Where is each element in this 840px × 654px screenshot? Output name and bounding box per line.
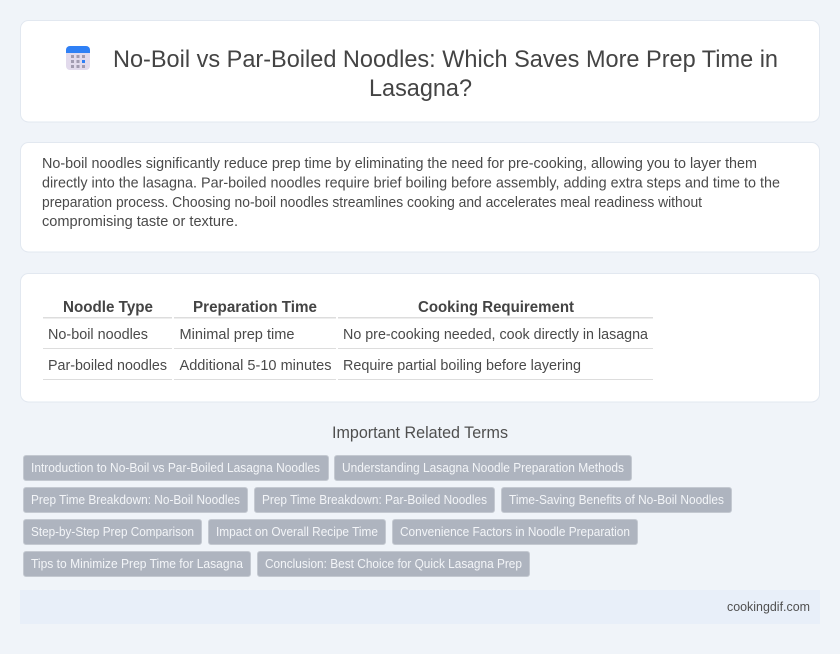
tag [24,520,202,544]
heading: related terms: Important Related Terms [332,424,508,442]
tag: Understanding Lasagna Noodle Preparation Methods [342,461,624,475]
tag: Convenience Factors in Noodle Preparation [400,525,630,539]
tag: Conclusion: Best Choice for Quick Lasagna Prep [265,557,522,571]
footer source: cookingdif.com [727,599,810,614]
tag [334,456,632,480]
tag [254,488,494,512]
table header [63,299,575,316]
tag: Step-by-Step Prep Comparison [31,525,194,539]
summary text: directly into the lasagna. Par-boiled noodles require brief boiling before assembly, adding extra steps and time to the [42,176,780,192]
tag: Time-Saving Benefits of No-Boil Noodles [509,493,724,507]
tag [24,456,328,480]
footer [20,590,820,624]
summary text: preparation process. Choosing no-boil noodles streamlines cooking and accelerates meal readiness without [42,195,702,211]
table rows: Require partial boiling before layering [343,358,581,374]
tag list [24,456,732,576]
tag [258,552,530,576]
table header: Noodle Type [63,299,153,316]
tag [24,488,248,512]
panel: summary [20,142,820,252]
panel: header [20,20,820,122]
tag: Introduction to No-Boil vs Par-Boiled Lasagna Noodles [31,461,320,475]
tag: Tips to Minimize Prep Time for Lasagna [31,557,243,571]
table rows: Minimal prep time [180,327,294,343]
table rows [48,327,648,374]
tag [24,552,250,576]
table rows: No pre-cooking needed, cook directly in lasagna [343,327,648,343]
tag [208,520,386,544]
table header: Cooking Requirement [418,299,575,316]
table header: Preparation Time [193,299,317,316]
table rows: No-boil noodles [48,327,148,343]
summary text: No-boil noodles significantly reduce prep time by eliminating the need for pre-cooking, allowing you to layer them [42,156,757,172]
tag [502,488,732,512]
table rows: Par-boiled noodles [48,358,167,374]
tag: Prep Time Breakdown: Par-Boiled Noodles [262,493,487,507]
summary text: compromising taste or texture. [42,214,238,230]
tag [392,520,638,544]
title: No-Boil vs Par-Boiled Noodles: Which Saves More Prep Time in [113,46,778,73]
table rows: Additional 5-10 minutes [180,358,332,374]
icon: calendar [66,46,90,70]
tag: Prep Time Breakdown: No-Boil Noodles [31,493,240,507]
title: Lasagna? [369,75,472,102]
tag: Impact on Overall Recipe Time [216,525,378,539]
panel: comparison table [20,274,820,402]
